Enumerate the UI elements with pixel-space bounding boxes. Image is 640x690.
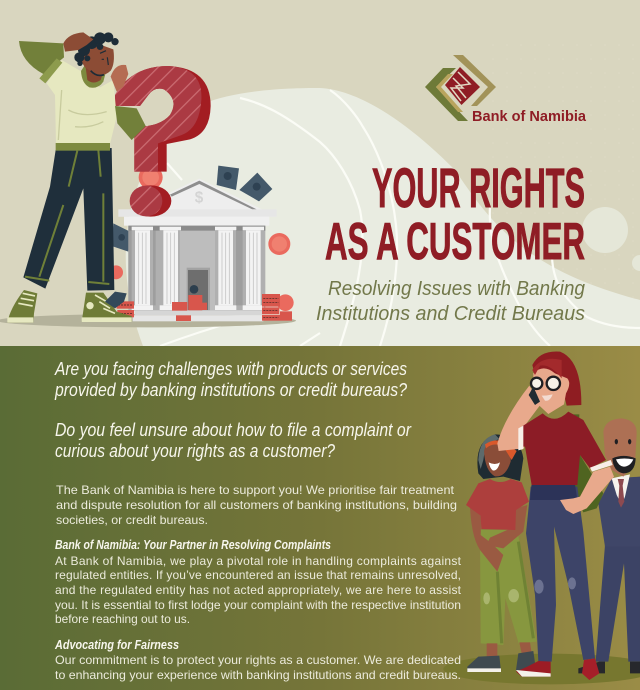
text block: questions [54,359,412,461]
icon: question mark [115,66,211,217]
woman knee patches [534,577,576,594]
bank walls [128,226,265,311]
illustration: confused man [7,32,146,323]
man smile [616,458,633,467]
illustration: three customers [443,351,640,684]
panel: information background [0,346,640,690]
text block: partner paragraph: and the regulated entity has not acted appropriately, we are here to assist [55,583,462,597]
text block: fairness paragraph: Our commitment is to protect your rights as a customer. We are dedicated [55,653,461,667]
man front sleeve [115,106,146,140]
woman phone [529,387,540,405]
woman hair back [532,351,581,406]
man shirt [47,60,117,144]
man trousers [596,545,640,662]
illustration: bank building with money [0,66,296,327]
woman smile [542,394,553,401]
heading: partner in resolving complaints: Bank of Namibia: Your Partner in Resolving Complaints [55,537,331,552]
ground shadow [0,314,296,327]
man head [603,418,637,477]
man scratching hand [63,32,93,52]
text block: introduction: societies, or credit bureaus. [56,513,208,527]
ground shadow [443,654,640,684]
subtitle [316,278,585,325]
text block: fairness paragraph [55,653,461,682]
man chin hand [111,65,128,92]
woman glasses [531,377,560,390]
text block: partner paragraph: you. It is essential to first lodge your complaint with the respective institution [55,598,461,612]
girl head [484,441,511,476]
woman right shoe [582,658,599,680]
man curly hair [74,32,119,66]
woman sleeve cuffs [518,426,613,472]
man eye and brow [100,51,108,65]
man suit jacket [598,477,640,547]
man neck [85,65,103,82]
text block: questions: curious about your rights as a customer? [55,441,335,461]
text block: partner paragraph [55,554,462,626]
text block: questions: provided by banking institutions or credit bureaus? [54,380,407,400]
panel: header background [0,0,640,346]
woman [497,351,614,680]
girl smile [489,462,500,470]
girl trouser stripes [497,542,533,643]
text block: introduction: and dispute resolution for all customers of banking institutions, building [56,498,457,512]
shirt hem [56,143,110,151]
subtitle: Resolving Issues with Banking [328,278,585,300]
girl shoes [467,651,536,673]
icon: banknotes [112,166,272,252]
heading: advocating for fairness: Advocating for Fairness [54,637,179,652]
woman left shoe [516,661,551,677]
icon: stacked bricks [117,294,292,321]
bank pediment [118,179,277,226]
woman shirt [522,412,606,485]
girl legs [480,530,537,645]
man beard [612,456,636,473]
logo: Bank of Namibia [425,55,587,125]
man shoe [578,662,640,673]
text block: partner paragraph: before reaching out to us. [55,612,190,626]
girl hair [477,434,523,481]
girl hair band [485,440,517,460]
text block: fairness paragraph: to enhancing your experience with banking institutions and credit bureaus. [55,668,461,682]
icon: coins [109,165,294,311]
girl top [466,479,529,530]
text block: questions: Are you facing challenges with products or services [54,359,407,379]
man beard line [91,71,104,75]
man back sleeve [19,41,64,74]
man sleeve cuff [39,58,62,83]
man collar [81,63,106,88]
text block: introduction: The Bank of Namibia is here to support you! We prioritise fair treatment [56,483,455,497]
man trousers [23,148,114,291]
text block: partner paragraph: At Bank of Namibia, we play a pivotal role in handling complaints against [55,554,462,568]
woman face [533,368,569,414]
woman waistband [530,483,577,500]
text block: questions: Do you feel unsure about how to file a complaint or [55,420,412,440]
girl [466,434,537,673]
man [578,418,640,673]
girl arms [470,505,527,572]
woman fringe [532,359,562,378]
shoe soles [467,668,551,677]
shirt fold lines [58,90,107,140]
man tie [618,479,624,508]
bank pediment: $ [195,189,204,206]
logo wordmark: Bank of Namibia [472,108,587,125]
bank steps [133,310,263,321]
woman other arm [560,467,614,514]
logo mark [425,55,496,121]
title [325,156,585,271]
man left shoe [7,290,37,323]
trouser seams [25,150,109,284]
man face [80,43,114,75]
woman raised arm [497,386,541,451]
woman jeans [526,487,595,662]
text block: introduction [56,483,457,527]
man right shoe [82,292,132,322]
woman bag [571,414,603,512]
man eyes [615,439,631,444]
bank columns [128,227,264,310]
girl knee patches [483,589,519,604]
girl ankles [487,642,532,657]
man shirt and collar [612,474,630,505]
subtitle: Institutions and Credit Bureaus [316,303,585,325]
text block: partner paragraph: regulated entities. If you’ve encountered an issue that remains unresolved, [55,568,461,582]
